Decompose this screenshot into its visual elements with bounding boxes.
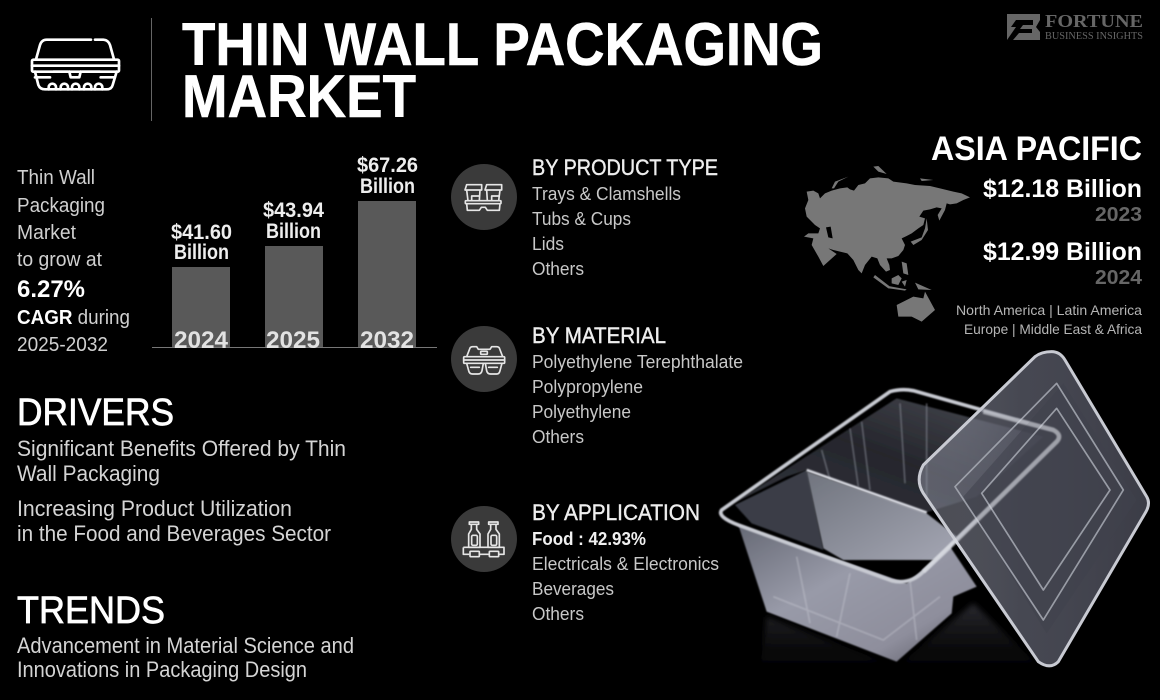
header divider (151, 18, 152, 121)
illustration: clear plastic container and lid (721, 352, 1149, 693)
bar chart: market size: Billion (174, 241, 229, 264)
bar chart: market size: Billion (266, 220, 321, 243)
panel: drivers: in the Food and Beverages Sector (17, 521, 331, 546)
title (182, 11, 823, 130)
panel: by product type: Lids (532, 234, 564, 254)
panel: drivers: DRIVERS (17, 392, 174, 434)
bar chart: market size: $67.26 (357, 154, 418, 177)
text block: CAGR statement: Market (17, 222, 76, 244)
tray ribs (822, 403, 927, 497)
panel: by application: Electricals & Electronics (532, 554, 719, 574)
logo: Fortune Business Insights: BUSINESS INSIGHTS (1045, 31, 1143, 42)
panel: by product type: Tubs & Cups (532, 209, 631, 229)
panel: drivers (17, 392, 346, 546)
tray rim seen through lid (923, 412, 1059, 572)
map: Asia Pacific (804, 166, 970, 322)
panel: drivers: Increasing Product Utilization (17, 496, 292, 521)
panel: by material: Polyethylene Terephthalate (532, 352, 743, 372)
icon: cup tray (451, 164, 517, 230)
bar chart: market size: 2024 (174, 327, 229, 354)
panel: Asia Pacific figures: 2023 (1095, 204, 1142, 226)
tray front wall (738, 525, 977, 662)
bar chart: market size: Billion (360, 175, 415, 198)
text block: other regions: Europe | Middle East & Africa (964, 321, 1142, 337)
text block: CAGR statement (17, 167, 130, 356)
panel: Asia Pacific figures: ASIA PACIFIC (931, 130, 1142, 168)
panel: by product type: Trays & Clamshells (532, 184, 681, 204)
panel: Asia Pacific figures: 2024 (1095, 267, 1143, 289)
panel: by material: BY MATERIAL (532, 323, 666, 348)
panel: by material: Others (532, 427, 584, 447)
bar chart: market size (152, 154, 437, 354)
lid steps (955, 383, 1123, 620)
title: THIN WALL PACKAGING (182, 11, 823, 78)
text block: CAGR statement: CAGR during (17, 307, 130, 329)
icon: bottle carrier (451, 506, 517, 572)
panel: by material (532, 323, 743, 447)
tray left compartment (735, 470, 823, 550)
title: MARKET (182, 63, 416, 130)
text block: CAGR statement: Thin Wall (17, 167, 95, 189)
panel: drivers: Wall Packaging (17, 461, 160, 486)
bar chart: market size: 2025 (266, 327, 320, 354)
tray rim (721, 390, 1059, 582)
panel: by application: Others (532, 604, 584, 624)
text block: other regions (956, 302, 1142, 337)
tray floor line and ribs (773, 557, 940, 640)
panel: trends: Advancement in Material Science and (17, 633, 354, 658)
tray divider wall (807, 472, 957, 560)
text block: CAGR statement: to grow at (17, 249, 102, 271)
text block: other regions: North America | Latin America (956, 302, 1142, 318)
lid body (919, 352, 1149, 666)
panel: drivers: Significant Benefits Offered by Thin (17, 436, 346, 461)
icon: food container (32, 40, 119, 89)
logo: Fortune Business Insights (1007, 11, 1143, 42)
panel: by application: Food : 42.93% (532, 529, 646, 549)
icon: egg carton clamshell (451, 326, 517, 392)
panel: trends: Innovations in Packaging Design (17, 657, 307, 682)
panel: by material: Polyethylene (532, 402, 631, 422)
panel: by application (532, 500, 719, 624)
panel: by product type: Others (532, 259, 584, 279)
lid darker panel (963, 383, 1137, 633)
bar chart: market size: $41.60 (171, 221, 232, 244)
panel: Asia Pacific figures: $12.18 Billion (983, 175, 1142, 203)
panel: by application: Beverages (532, 579, 614, 599)
panel: by material: Polypropylene (532, 377, 643, 397)
bar chart: market size: $43.94 (263, 199, 324, 222)
panel: trends: TRENDS (17, 590, 165, 632)
tray back interior (733, 398, 1043, 513)
divider top edge (807, 470, 927, 513)
panel: trends (17, 590, 354, 682)
logo: Fortune Business Insights: FORTUNE (1045, 11, 1143, 31)
panel: by product type (532, 155, 718, 279)
panel: Asia Pacific figures: $12.99 Billion (983, 238, 1142, 266)
panel: by product type: BY PRODUCT TYPE (532, 155, 718, 180)
text block: CAGR statement: 2025-2032 (17, 334, 108, 356)
bar chart: market size: 2032 (360, 327, 414, 354)
text block: CAGR statement: 6.27% (17, 276, 85, 303)
panel: Asia Pacific figures (931, 130, 1143, 289)
reflection (757, 603, 1043, 693)
panel: by application: BY APPLICATION (532, 500, 700, 525)
text block: CAGR statement: Packaging (17, 195, 105, 217)
